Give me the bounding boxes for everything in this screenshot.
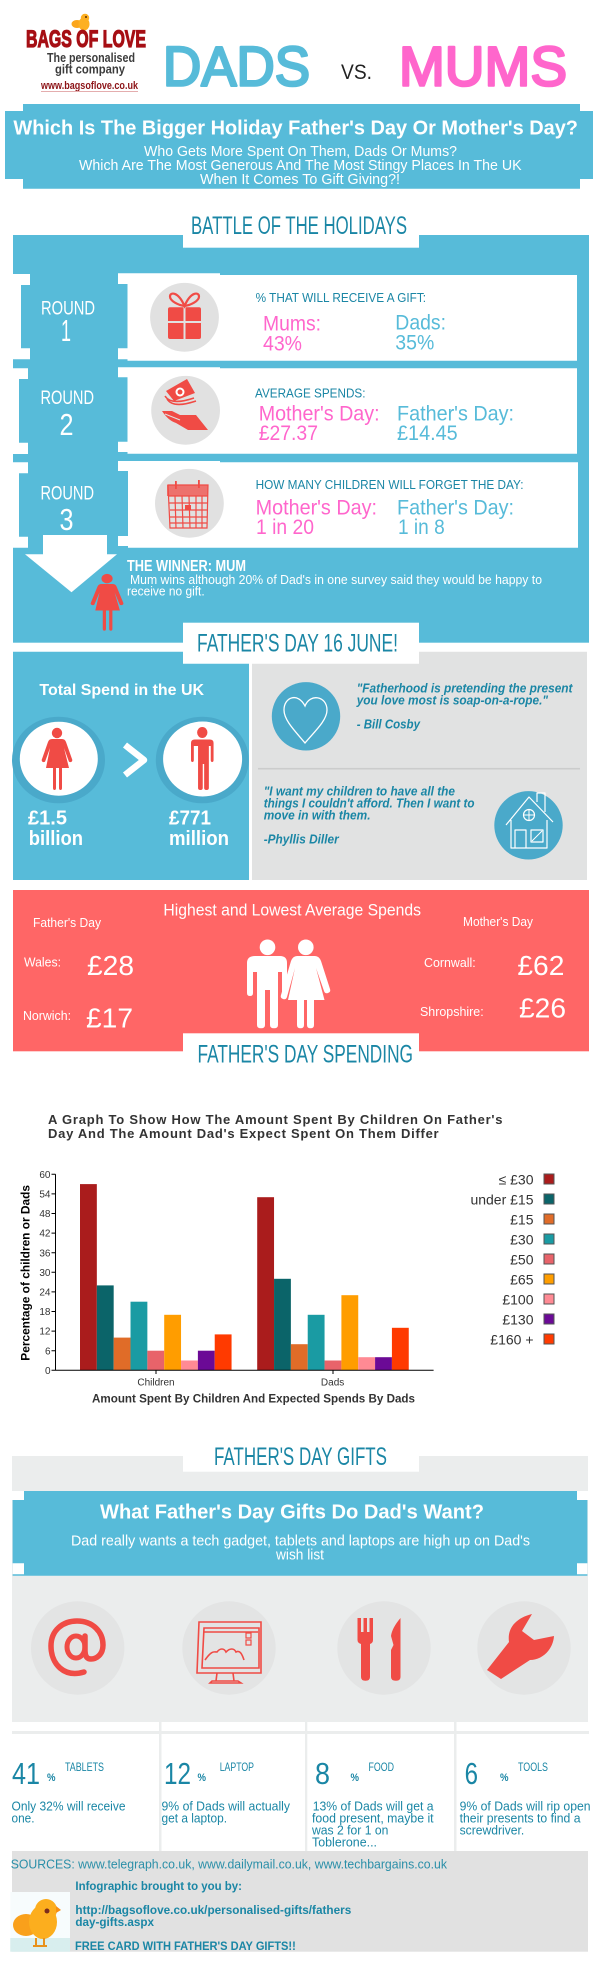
footer duck [10, 1892, 70, 1952]
banner subheading: Who Gets More Spent On Them, Dads Or Mums? [144, 143, 457, 160]
stat: food: 8 [315, 1756, 330, 1791]
quote: Bill Cosby: you love most is soap-on-a-rope." [356, 693, 549, 708]
bar chart [18, 1170, 434, 1406]
round 3 tab: 3 [60, 502, 74, 537]
banner subheading [79, 143, 522, 188]
gifts banner heading: What Father's Day Gifts Do Dad's Want? [100, 1501, 484, 1524]
stat: tools [460, 1756, 591, 1838]
round 1 question: % THAT WILL RECEIVE A GIFT: [256, 290, 426, 305]
winner text: receive no gift. [127, 585, 205, 599]
footer credit: day-gifts.aspx [75, 1915, 154, 1929]
column: mother's day: Shropshire: [420, 1005, 484, 1019]
round 1 tab [13, 274, 95, 359]
stat: tablets: one. [12, 1811, 34, 1826]
stat: tools: % [500, 1772, 509, 1784]
quote: Phyllis Diller: "I want my children to have all the [264, 784, 455, 799]
stat: dads gift: Dads: [395, 312, 446, 335]
banner subheading: When It Comes To Gift Giving?! [200, 171, 400, 188]
column: father's day: Norwich: [23, 1009, 71, 1023]
logo strapline [47, 50, 135, 76]
stat: tools: screwdriver. [460, 1823, 524, 1838]
round 1 tab: 1 [61, 313, 71, 348]
y axis labels: 12 [39, 1327, 51, 1338]
column: mother's day: £62 [517, 950, 564, 981]
y axis labels: 6 [45, 1346, 51, 1357]
logo: Bags of Love [26, 14, 146, 92]
chart legend [470, 1171, 554, 1347]
stat: tablets: Only 32% will receive [12, 1799, 126, 1814]
logo wordmark: BAGS OF LOVE [26, 26, 146, 53]
footer credit: FREE CARD WITH FATHER'S DAY GIFTS!! [75, 1939, 296, 1953]
section header: battle of the holidays [183, 205, 419, 248]
stat: fathers day spend [397, 402, 514, 445]
section header: fathers day spending [183, 1033, 419, 1071]
chart title: Day And The Amount Dad's Expect Spent On Them Differ [48, 1126, 439, 1141]
round 1 card [118, 273, 577, 361]
y axis title: Percentage of children or Dads [18, 1185, 32, 1361]
column: father's day: £28 [87, 950, 134, 981]
round 2 tab: ROUND [40, 388, 94, 409]
chart legend: £50 [510, 1251, 534, 1267]
chart title: A Graph To Show How The Amount Spent By Children On Father's [48, 1112, 502, 1127]
chart title [48, 1112, 502, 1141]
stat: mothers day spend [259, 402, 380, 445]
icon: couple [247, 940, 330, 1028]
panel: highest and lowest average spends [13, 890, 589, 1051]
stat: tablets: 41 [12, 1756, 40, 1791]
stat: laptop: 12 [164, 1756, 191, 1791]
round 1 tab: ROUND [41, 298, 95, 319]
quote: Bill Cosby [356, 681, 573, 732]
y axis labels: 60 [39, 1170, 51, 1181]
stat: tools: TOOLS [518, 1760, 548, 1774]
quote: Phyllis Diller: things I couldn't afford. Then I want to [264, 796, 475, 811]
y axis labels: 42 [39, 1229, 51, 1240]
chart legend: £130 [502, 1311, 534, 1327]
banner: main question [5, 104, 593, 189]
gifts banner text: wish list [275, 1547, 325, 1564]
y axis labels: 30 [39, 1268, 51, 1279]
stat: dad total [169, 807, 229, 850]
winner text: Mum wins although 20% of Dad's in one survey said they would be happy to [130, 573, 542, 587]
stat: food: 13% of Dads will get a [313, 1799, 434, 1814]
stat: dads gift [395, 312, 446, 355]
icon: dad circle [156, 717, 249, 803]
chart legend: under £15 [470, 1191, 534, 1207]
logo strapline: gift company [55, 62, 126, 76]
column: father's day: Wales: [24, 956, 61, 970]
chart legend: £30 [510, 1231, 534, 1247]
stat: tablets: TABLETS [65, 1760, 104, 1774]
round 2 card [118, 367, 577, 454]
round 3 card [118, 461, 578, 548]
section header: fathers day gifts [183, 1440, 419, 1472]
icon: wrench [477, 1601, 571, 1695]
column: mother's day: Cornwall: [424, 956, 476, 970]
stat: mum total: £1.5 [28, 807, 67, 829]
logo strapline: The personalised [47, 50, 135, 65]
icon: winner woman [91, 574, 123, 631]
stat: laptop: LAPTOP [220, 1760, 254, 1774]
stat: food: FOOD [368, 1760, 394, 1774]
section header: fathers day 16 june [183, 623, 419, 664]
stat: tablets: % [47, 1772, 56, 1784]
winner heading: THE WINNER: MUM [127, 558, 246, 575]
icon: logo duck [72, 14, 90, 31]
stat: mothers day forget [256, 496, 377, 539]
title: DADS: DADS [163, 34, 310, 98]
category labels: Dads [321, 1378, 344, 1389]
stat: laptop [162, 1756, 290, 1826]
spends heading: Highest and Lowest Average Spends [163, 902, 421, 920]
stat: fathers day forget: 1 in 8 [398, 516, 445, 539]
banner heading: Which Is The Bigger Holiday Father's Day Or Mother's Day? [13, 117, 578, 139]
bars: children [80, 1184, 232, 1370]
gifts banner [12, 1491, 588, 1576]
stat: mum total: billion [29, 828, 83, 850]
y axis labels: 18 [39, 1307, 51, 1318]
y axis labels: 54 [39, 1190, 51, 1200]
quote: Phyllis Diller: -Phyllis Diller [264, 832, 340, 847]
title: vs.: VS. [341, 61, 372, 84]
icon: knife and fork [337, 1601, 431, 1695]
footer credit: http://bagsoflove.co.uk/personalised-gifts/fathers [75, 1903, 352, 1917]
stat: dad total: £771 [169, 807, 211, 829]
stat: mums gift [263, 313, 321, 356]
total spend heading: Total Spend in the UK [39, 682, 204, 699]
gifts banner text: Dad really wants a tech gadget, tablets and laptops are high up on Dad's [71, 1533, 530, 1550]
y axis labels [39, 1170, 51, 1377]
stats grid lines [12, 1722, 589, 1855]
bars: dads [257, 1197, 409, 1370]
chart legend: £15 [510, 1211, 534, 1227]
arrow: down to winner [25, 535, 117, 592]
arrow: greater than [125, 745, 144, 775]
round 3 question: HOW MANY CHILDREN WILL FORGET THE DAY: [256, 477, 524, 492]
stat: dad total: million [169, 828, 229, 850]
stat: mums gift: 43% [263, 333, 302, 356]
logo url: www.bagsoflove.co.uk [40, 80, 139, 92]
stat: laptop: get a laptop. [162, 1811, 227, 1826]
stat: tools: 9% of Dads will rip open [460, 1799, 591, 1814]
stat: mothers day spend: £27.37 [259, 422, 318, 445]
column: mother's day: Mother's Day [463, 915, 534, 929]
icon: calendar [155, 469, 224, 538]
panel: footer [10, 1851, 588, 1953]
stat: mothers day spend: Mother's Day: [259, 402, 380, 425]
round 2 question: AVERAGE SPENDS: [255, 385, 366, 400]
stat: mothers day forget: 1 in 20 [256, 516, 314, 539]
category labels: Children [137, 1378, 175, 1389]
winner text [127, 573, 542, 599]
stat: food [311, 1756, 434, 1850]
round 2 tab [13, 368, 94, 454]
stat: laptop: % [198, 1772, 206, 1784]
panel: fathers day gifts [12, 1440, 588, 1722]
stat: mothers day forget: Mother's Day: [256, 496, 377, 519]
stat: food: % [350, 1772, 359, 1784]
quote: Bill Cosby: "Fatherhood is pretending the present [357, 681, 573, 696]
section header: fathers day 16 june: FATHER'S DAY 16 JUNE! [197, 630, 398, 658]
icon: monitor [182, 1601, 276, 1695]
icon: mum circle [12, 717, 105, 803]
y axis labels: 24 [39, 1288, 51, 1298]
quote: Phyllis Diller: move in with them. [264, 808, 370, 823]
stat: tools: their presents to find a [460, 1811, 581, 1826]
stat: laptop: 9% of Dads will actually [162, 1799, 290, 1814]
panel: battle of the holidays [13, 205, 589, 643]
round 3 tab [13, 462, 94, 548]
footer credit [75, 1879, 352, 1953]
sources: SOURCES: www.telegraph.co.uk, www.dailymail.co.uk, www.techbargains.co.uk [11, 1856, 447, 1871]
round 3 tab: ROUND [40, 483, 94, 504]
quote: Phyllis Diller [264, 784, 475, 847]
stat: food: Toblerone... [312, 1835, 377, 1850]
axes [52, 1174, 434, 1374]
section header: fathers day gifts: FATHER'S DAY GIFTS [214, 1443, 387, 1471]
column: mother's day [420, 915, 566, 1024]
gifts banner text [71, 1533, 530, 1564]
chart legend: £100 [502, 1291, 534, 1307]
banner subheading: Which Are The Most Generous And The Most Stingy Places In The UK [79, 157, 522, 174]
icon: money and hand [151, 376, 220, 445]
stat: tablets [12, 1756, 126, 1826]
chart legend: ≤ £30 [499, 1171, 534, 1187]
panel: quotes [252, 652, 587, 880]
category labels [137, 1378, 344, 1389]
panel: total spend [12, 652, 249, 880]
column: father's day: Father's Day [33, 916, 102, 930]
column: father's day: £17 [86, 1003, 133, 1034]
x axis title: Amount Spent By Children And Expected Spends By Dads [92, 1392, 415, 1406]
icon: gift [150, 283, 219, 352]
y axis labels: 36 [39, 1248, 51, 1259]
footer credit: Infographic brought to you by: [75, 1879, 242, 1893]
quote: Bill Cosby: - Bill Cosby [357, 717, 421, 732]
stat: fathers day forget: Father's Day: [397, 496, 514, 519]
title: MUMS: MUMS [399, 34, 567, 98]
y axis labels: 48 [39, 1209, 51, 1220]
stat: dads gift: 35% [395, 332, 434, 355]
stat: food: was 2 for 1 on [311, 1823, 388, 1838]
stat: food: food present, maybe it [312, 1811, 434, 1826]
chart legend: £65 [510, 1271, 534, 1287]
icon: house [494, 791, 563, 860]
icon: heart [272, 682, 340, 750]
stat: mum total [28, 807, 83, 850]
stat: fathers day spend: Father's Day: [397, 402, 514, 425]
stat: fathers day forget [397, 496, 514, 539]
section header: battle of the holidays: BATTLE OF THE HOLIDAYS [191, 212, 407, 240]
y axis labels: 0 [45, 1366, 51, 1377]
section header: fathers day spending: FATHER'S DAY SPENDING [198, 1041, 413, 1069]
round 2 tab: 2 [60, 407, 74, 442]
column: mother's day: £26 [519, 993, 566, 1024]
stat: tools: 6 [465, 1756, 478, 1791]
column: father's day [23, 916, 134, 1034]
icon: at sign [31, 1601, 124, 1695]
stat: fathers day spend: £14.45 [397, 422, 458, 445]
chart legend: £160 + [490, 1331, 534, 1347]
stat: mums gift: Mums: [263, 313, 321, 336]
